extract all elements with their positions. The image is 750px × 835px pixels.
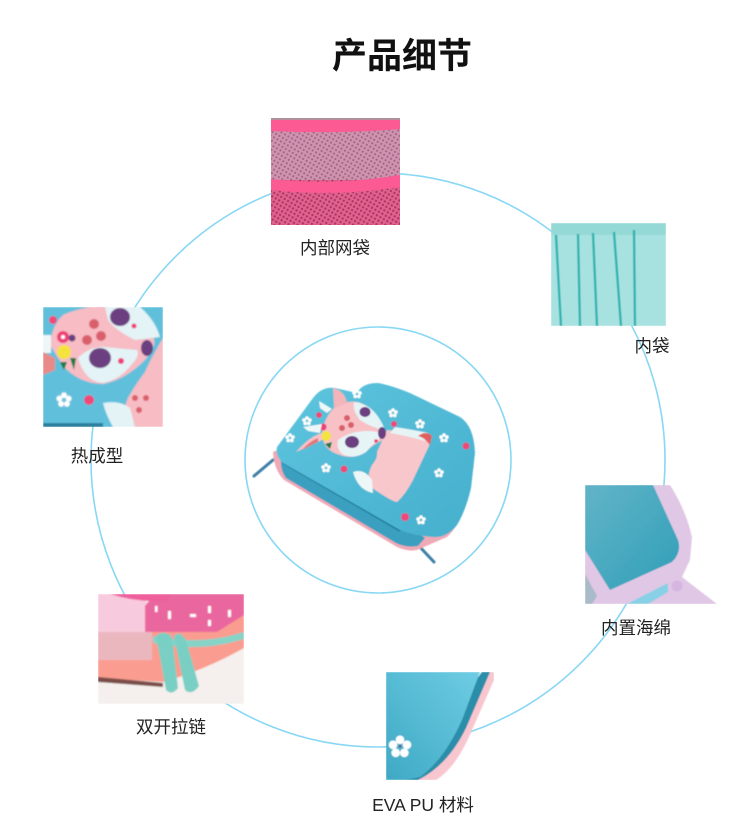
detail: built-in sponge bbox=[585, 485, 717, 604]
label: double zipper: 双开拉链 bbox=[136, 717, 206, 737]
label: inner mesh pocket: 内部网袋 bbox=[300, 238, 370, 258]
antlers bbox=[303, 401, 332, 433]
title: 产品细节 bbox=[332, 37, 472, 76]
case lid bbox=[277, 383, 475, 537]
label: built-in sponge: 内置海绵 bbox=[601, 618, 671, 638]
detail: thermoformed bbox=[43, 307, 163, 427]
label: EVA PU material: EVA PU 材料 bbox=[372, 795, 474, 815]
deer tail bbox=[353, 471, 373, 493]
large connecting ring bbox=[91, 173, 665, 747]
label: inner pocket: 内袋 bbox=[634, 336, 670, 356]
deer body bbox=[368, 430, 431, 502]
ears bbox=[333, 388, 347, 408]
flowers bbox=[285, 433, 295, 442]
label: thermoformed: 热成型 bbox=[71, 446, 123, 466]
case base bbox=[273, 440, 474, 551]
detail: inner pocket bbox=[551, 223, 666, 326]
detail: inner mesh pocket bbox=[271, 118, 400, 225]
central product: pencil case bbox=[254, 383, 475, 562]
zipper pulls bbox=[254, 460, 434, 562]
detail: double zipper bbox=[98, 594, 244, 704]
central ring bbox=[245, 327, 511, 593]
deer head bbox=[322, 402, 385, 457]
detail: EVA PU material bbox=[386, 672, 494, 780]
strawberries bbox=[316, 412, 470, 521]
